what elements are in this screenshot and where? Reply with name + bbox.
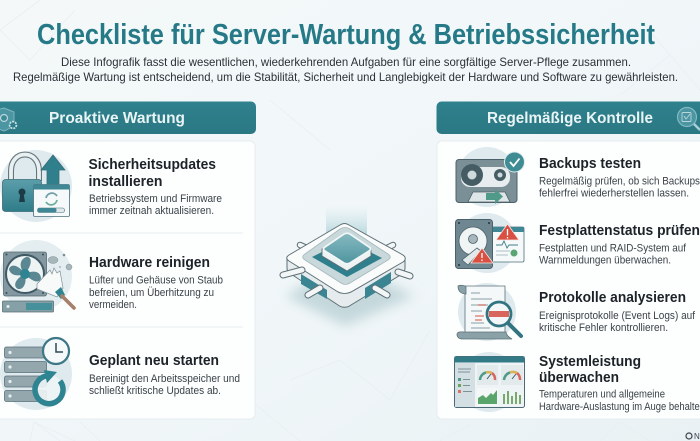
item text <box>539 155 700 200</box>
intro text: Diese Infografik fasst die wesentlichen, wiederkehrenden Aufgaben für eine sorgfältige Server-Pflege zusammen. <box>61 55 631 69</box>
item text: Backups testen <box>539 155 641 172</box>
item text: Warnmeldungen überwachen. <box>539 254 671 266</box>
panel header: Regelmäßige Kontrolle <box>487 110 653 127</box>
panel: Regelmäßige Kontrolle <box>436 102 700 419</box>
item text: schließt kritische Updates ab. <box>89 385 221 397</box>
footer logo mark <box>686 432 700 441</box>
icon: shield with gears <box>0 108 16 131</box>
item text: Sicherheitsupdates <box>88 156 216 173</box>
panel header <box>436 102 700 134</box>
item text: Protokolle analysieren <box>539 289 686 306</box>
item text <box>539 353 700 413</box>
icon: backup tape <box>456 147 524 207</box>
item: Geplant neu starten <box>0 338 240 410</box>
item: Hardware reinigen <box>0 240 223 312</box>
card <box>0 141 255 419</box>
central server chip illustration <box>283 205 415 326</box>
item text: Geplant neu starten <box>89 352 219 369</box>
item text: befreien, um Überhitzung zu <box>89 287 214 299</box>
footer logo mark: N <box>694 432 700 441</box>
panel header <box>0 102 256 134</box>
item: Festplattenstatus prüfen <box>456 213 700 273</box>
item text: immer zeitnah aktualisieren. <box>89 205 214 217</box>
icon: log scroll with magnifier <box>457 283 521 341</box>
item text <box>89 254 223 311</box>
item text: installieren <box>88 173 162 190</box>
icon: hard disk warning <box>456 213 524 273</box>
panel header: Proaktive Wartung <box>49 110 185 127</box>
item text <box>88 156 222 217</box>
item: Backups testen <box>456 147 700 207</box>
item text: Lüfter und Gehäuse von Staub <box>89 274 223 286</box>
panel: Proaktive Wartung <box>0 102 256 419</box>
item text: überwachen <box>539 369 619 386</box>
item: Protokolle analysieren <box>457 283 696 341</box>
item text: vermeiden. <box>89 299 137 311</box>
item: Systemleistung überwachen <box>454 352 700 413</box>
intro text: Regelmäßige Wartung ist entscheidend, um die Stabilität, Sicherheit und Langlebigkeit der Hardware und Software zu gewährleisten. <box>13 70 678 84</box>
item text: Systemleistung <box>539 353 641 370</box>
item text <box>539 222 700 266</box>
card <box>437 141 700 419</box>
item text: Hardware reinigen <box>89 254 210 271</box>
item text: Temperaturen und allgemeine <box>539 388 665 400</box>
item: Sicherheitsupdates installieren <box>0 150 222 222</box>
icon: server stack, clock and restart <box>0 338 72 410</box>
icon: lock and update arrow <box>0 150 72 222</box>
item text <box>539 289 696 334</box>
item text: Betriebssystem und Firmware <box>89 193 222 205</box>
icon: performance dashboard <box>454 352 524 412</box>
intro text <box>13 55 678 84</box>
item text <box>89 352 240 397</box>
icon: fan and duster <box>0 240 74 312</box>
icon: magnifier with checklist <box>678 108 700 130</box>
item text: kritische Fehler kontrollieren. <box>539 322 668 334</box>
item text: Bereinigt den Arbeitsspeicher und <box>89 373 240 385</box>
